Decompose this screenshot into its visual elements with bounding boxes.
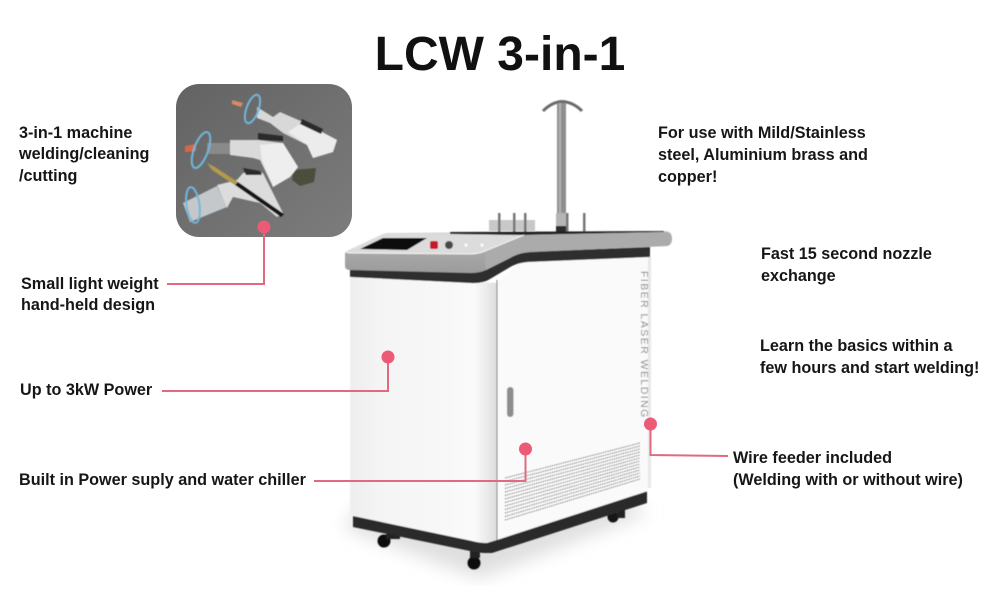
handle holder bbox=[543, 102, 582, 233]
text: up to 3kW power: Up to 3kW Power bbox=[20, 381, 152, 399]
text: learn the basics: few hours and start welding! bbox=[760, 359, 979, 377]
text: learn the basics bbox=[760, 337, 979, 377]
text: learn the basics: Learn the basics within a bbox=[760, 337, 953, 355]
text: wire feeder: Wire feeder included bbox=[733, 449, 892, 467]
text: wire feeder bbox=[733, 449, 963, 489]
text: built in power supply: Built in Power suply and water chiller bbox=[19, 471, 306, 489]
callout line: up to 3kW bbox=[162, 350, 394, 391]
text: nozzle exchange: Fast 15 second nozzle bbox=[761, 245, 932, 263]
door seam bbox=[496, 280, 498, 540]
black band under top bbox=[350, 247, 650, 283]
title: LCW 3-in-1 bbox=[375, 28, 625, 81]
text: small light weight: Small light weight bbox=[21, 274, 159, 292]
indicator lights bbox=[464, 244, 484, 246]
cabinet left face bbox=[350, 276, 497, 543]
text: materials bbox=[658, 124, 868, 186]
cabinet base bbox=[353, 490, 647, 570]
connectors on top bbox=[489, 213, 586, 232]
dark knob bbox=[445, 241, 453, 249]
tool: middle head bbox=[185, 130, 298, 187]
laser welding machine bbox=[345, 102, 672, 570]
tool: lower head bbox=[183, 163, 284, 224]
text: 3-in-1 machine bbox=[19, 124, 149, 185]
text: materials: For use with Mild/Stainless bbox=[658, 124, 866, 142]
text: nozzle exchange: exchange bbox=[761, 267, 836, 285]
text: wire feeder: (Welding with or without wire) bbox=[733, 471, 963, 489]
text: materials: copper! bbox=[658, 168, 717, 186]
text: 3-in-1 machine: /cutting bbox=[19, 167, 77, 185]
door handle bbox=[507, 387, 514, 417]
text: 3-in-1 machine: 3-in-1 machine bbox=[19, 124, 132, 142]
red button bbox=[430, 241, 438, 249]
text: small light weight bbox=[21, 274, 159, 314]
tool: top head bbox=[232, 93, 337, 158]
callout line: wire feeder bbox=[644, 418, 728, 456]
text: 3-in-1 machine: welding/cleaning bbox=[19, 145, 149, 163]
side label: FIBER LASER WELDING bbox=[638, 271, 650, 419]
callout line: small light weight bbox=[167, 220, 270, 284]
text: small light weight: hand-held design bbox=[21, 296, 155, 314]
cabinet right face bbox=[497, 256, 648, 540]
vent grille bbox=[505, 443, 640, 520]
floor shadow bbox=[345, 500, 650, 578]
text: nozzle exchange bbox=[761, 245, 932, 285]
text: materials: steel, Aluminium brass and bbox=[658, 146, 868, 164]
shadow under heads bbox=[292, 168, 316, 186]
touch screen bbox=[360, 238, 427, 250]
panel: welding heads photo bbox=[176, 84, 352, 237]
callout line: power supply bbox=[314, 442, 532, 481]
control panel top bbox=[345, 231, 672, 273]
